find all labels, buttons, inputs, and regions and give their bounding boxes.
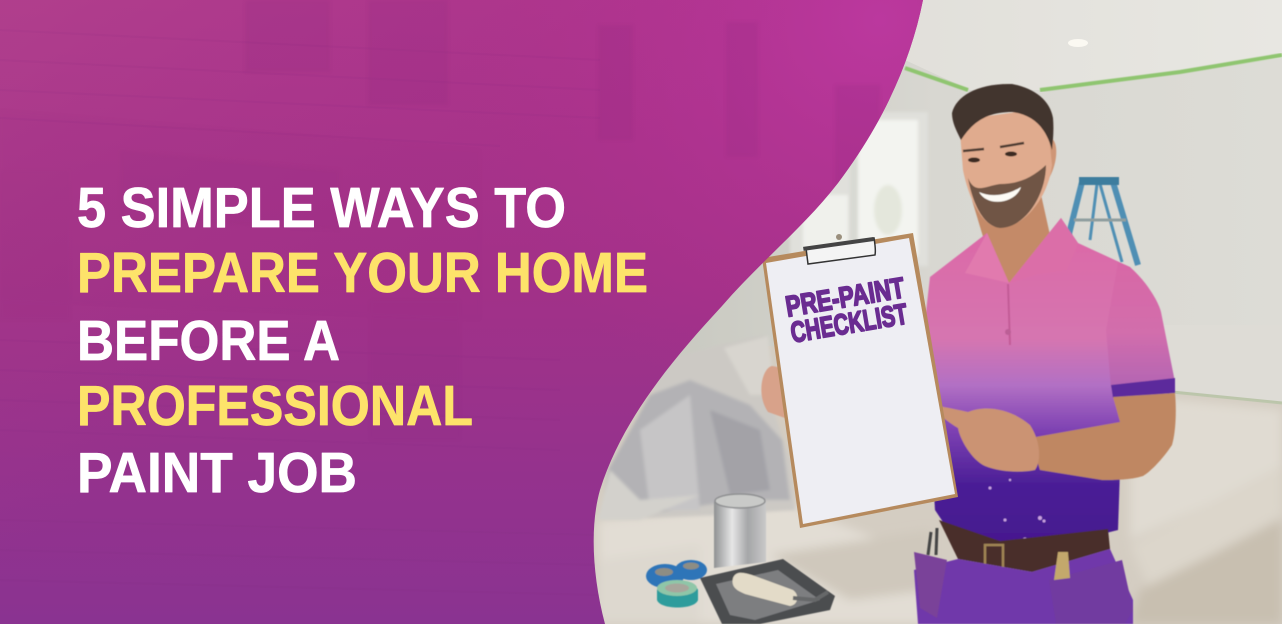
right pocket xyxy=(1049,552,1133,624)
neck xyxy=(972,190,1050,288)
right sleeve xyxy=(1106,262,1175,388)
title line 2: PREPARE YOUR HOME xyxy=(77,241,648,305)
hair xyxy=(952,84,1053,150)
title xyxy=(77,176,648,505)
head xyxy=(952,84,1056,228)
paint tray xyxy=(700,559,835,624)
man xyxy=(761,84,1176,624)
sleeve cuff xyxy=(1111,378,1175,398)
clipboard text: CHECKLIST xyxy=(788,298,910,350)
teal tape roll xyxy=(657,580,698,608)
window xyxy=(790,112,928,266)
title line 4: PROFESSIONAL xyxy=(77,374,473,438)
paper xyxy=(766,238,955,524)
clip xyxy=(803,234,875,264)
ladder xyxy=(1068,181,1138,265)
collar xyxy=(965,218,1078,345)
purple panel xyxy=(0,0,930,624)
clipboard text: PRE-PAINT xyxy=(783,272,907,324)
title line 3: BEFORE A xyxy=(77,309,340,373)
roller xyxy=(732,573,828,606)
beard xyxy=(968,165,1046,228)
pointing hand xyxy=(929,405,1039,472)
arm xyxy=(1030,393,1176,480)
left hand behind clipboard xyxy=(761,366,795,418)
photo background: room xyxy=(590,0,1282,624)
clipboard text xyxy=(783,272,910,350)
back wall xyxy=(590,58,1282,404)
title line 5: PAINT JOB xyxy=(77,441,357,505)
lower wall panel xyxy=(1160,325,1282,402)
covered sofa xyxy=(598,335,795,520)
smile xyxy=(979,187,1021,202)
blue tape rolls xyxy=(646,560,707,588)
left pocket xyxy=(914,528,947,618)
faint house facade xyxy=(0,0,880,440)
paint can xyxy=(714,494,766,568)
polo shirt torso xyxy=(924,218,1150,552)
ear xyxy=(1048,138,1056,180)
pants xyxy=(914,549,1133,624)
title line 1: 5 SIMPLE WAYS TO xyxy=(77,176,566,240)
clipboard xyxy=(762,233,958,528)
belt xyxy=(939,520,1110,572)
ceiling light xyxy=(1068,39,1088,47)
green masking tape xyxy=(905,55,1282,90)
eyes and brows xyxy=(963,143,1024,162)
face xyxy=(959,108,1052,228)
paint splatter xyxy=(988,479,1046,542)
floor folds xyxy=(598,398,1282,624)
paint supplies xyxy=(646,494,835,624)
ceiling xyxy=(590,0,1282,100)
board xyxy=(762,233,958,528)
floor base xyxy=(590,330,1282,624)
